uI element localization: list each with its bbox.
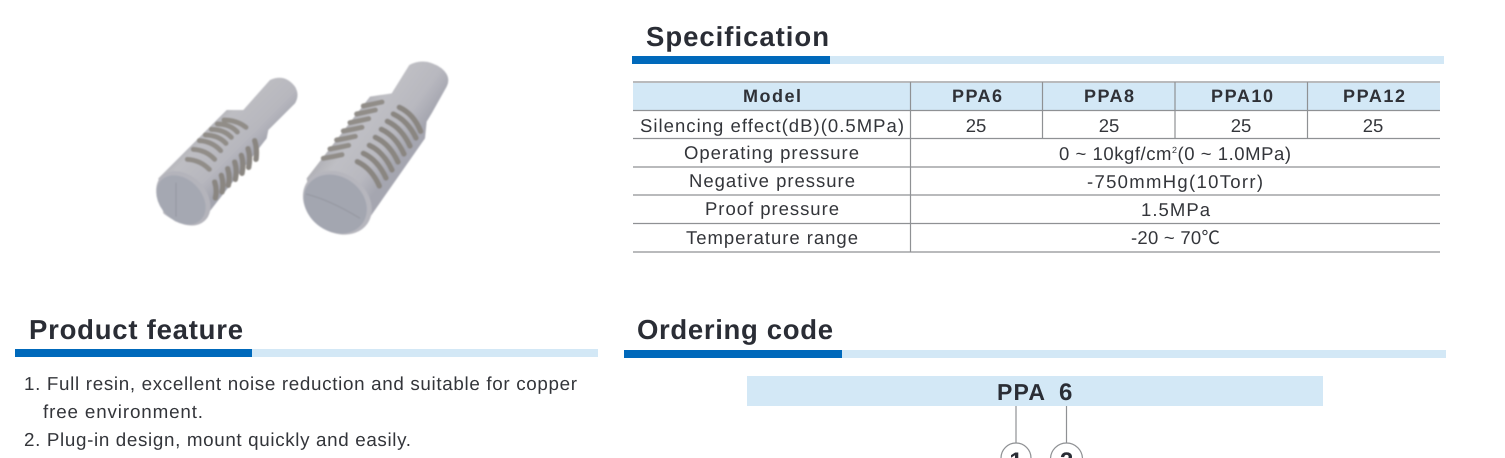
- row: silencing effect: 25: [1231, 115, 1251, 136]
- callout 2: [1050, 406, 1082, 458]
- row: negative pressure: Negative pressure: [689, 170, 855, 191]
- callout 1: [1001, 406, 1031, 458]
- row: operating pressure: 0 ~ 10kgf/cm: [1059, 143, 1171, 164]
- row: proof pressure: [705, 198, 1211, 220]
- row: silencing effect: 25: [1363, 115, 1383, 136]
- heading: Product feature: [15, 314, 598, 357]
- model code bar: PPA: [997, 379, 1045, 405]
- row: silencing effect: 25: [966, 115, 986, 136]
- feature list: free environment.: [43, 401, 203, 422]
- row: temperature range: -20 ~ 70℃: [1131, 227, 1220, 248]
- row: temperature range: Temperature range: [686, 227, 858, 248]
- table header row: PPA8: [1084, 86, 1134, 106]
- row: operating pressure: [684, 142, 1291, 164]
- row: operating pressure: Operating pressure: [684, 142, 859, 163]
- ordering code diagram: [747, 376, 1323, 458]
- feature list: 2. Plug-in design, mount quickly and easily.: [24, 429, 411, 450]
- row: silencing effect: 25: [1099, 115, 1119, 136]
- table grid lines: [633, 82, 1440, 252]
- table header row: PPA12: [1343, 86, 1405, 106]
- table header row: Model: [743, 86, 801, 106]
- table header row: PPA10: [1211, 86, 1273, 106]
- row: proof pressure: 1.5MPa: [1141, 199, 1211, 220]
- row: negative pressure: [689, 170, 1263, 192]
- heading: Specification: Specification: [646, 21, 829, 52]
- table header row: [633, 83, 1440, 110]
- row: negative pressure: -750mmHg(10Torr): [1087, 171, 1263, 192]
- row: silencing effect: Silencing effect(dB)(0.5MPa): [640, 115, 904, 136]
- product photo: large silencer: [290, 62, 448, 248]
- feature list: [24, 373, 577, 450]
- product photo: small silencer: [145, 78, 297, 236]
- heading: Ordering code: [624, 314, 1446, 358]
- table header row: PPA6: [952, 86, 1002, 106]
- model code bar: [747, 376, 1323, 406]
- row: proof pressure: Proof pressure: [705, 198, 839, 219]
- model code bar: 6: [1059, 379, 1072, 406]
- specification table: [633, 82, 1440, 252]
- heading: Specification: [632, 21, 1444, 64]
- heading: Ordering code: Ordering code: [637, 314, 833, 345]
- row: silencing effect: [640, 115, 1383, 136]
- row: temperature range: [686, 227, 1220, 248]
- row: operating pressure: (0 ~ 1.0MPa): [1178, 143, 1291, 164]
- row: operating pressure: 2: [1172, 145, 1177, 155]
- heading: Product feature: Product feature: [29, 314, 243, 345]
- feature list: 1. Full resin, excellent noise reduction and suitable for copper: [24, 373, 577, 394]
